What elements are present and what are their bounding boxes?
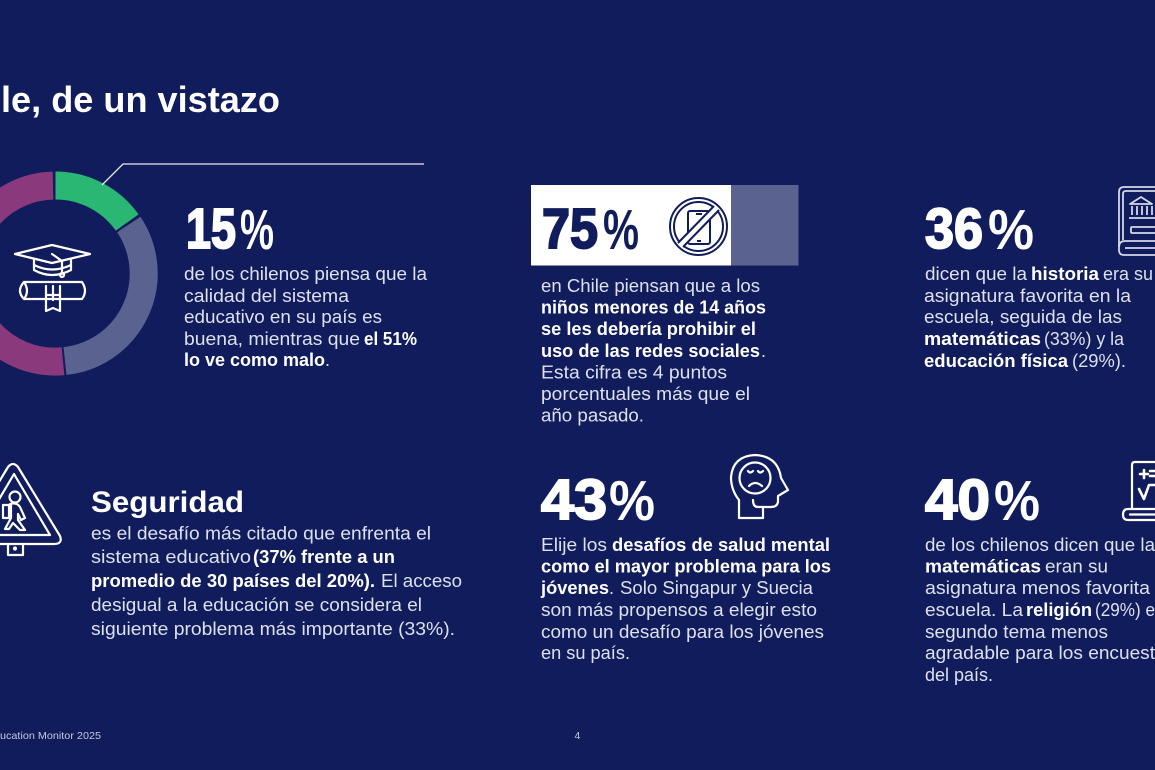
text block: least favourite: de los chilenos dicen que la (925, 535, 1155, 555)
panel: favourite subject (924, 187, 1155, 371)
text block: quality (184, 264, 428, 370)
text block: security: desigual a la educación se considera el (91, 595, 422, 615)
text block: security: (37% frente a un (253, 547, 395, 567)
text block: subjects: matemáticas (924, 329, 1041, 349)
icon: history book (1119, 187, 1155, 255)
stat: 40% (925, 468, 1040, 533)
text block: subjects: asignatura favorita en la (924, 286, 1132, 306)
text block: quality: educativo en su país es (184, 307, 382, 327)
stat: 43%: % (609, 469, 655, 533)
text block: least favourite: del país. (925, 665, 993, 685)
text block: least favourite (925, 535, 1155, 685)
text block: social media: en Chile piensan que a los (541, 276, 760, 296)
stat: 15%: % (240, 198, 274, 262)
page number: 4 (574, 730, 580, 742)
text block: least favourite: asignatura menos favorita (925, 578, 1151, 598)
text block: mental health: jóvenes (540, 578, 609, 598)
heading: Seguridad: Seguridad (91, 486, 244, 519)
text block: subjects: (29%). (1072, 351, 1126, 371)
text block: security: sistema educativo (91, 547, 251, 567)
stat bar: 75%: % (603, 198, 639, 262)
text block: mental health (540, 535, 831, 663)
stat: 36%: % (988, 198, 1034, 262)
text block: quality: calidad del sistema (184, 286, 350, 306)
text block: security: promedio de 30 países del 20%). (91, 571, 375, 591)
panel: least favourite subject (925, 462, 1155, 685)
icon: school crossing sign (0, 464, 61, 555)
text block: least favourite: religión (1026, 600, 1092, 620)
text block: quality: lo ve como malo (184, 350, 325, 370)
text block: subjects: historia (1031, 264, 1100, 284)
stat: 43%: 43 (541, 468, 607, 532)
footer source: ucation Monitor 2025 (0, 730, 101, 742)
text block: security (91, 524, 462, 639)
stat bar: 75%: 75 (542, 197, 598, 261)
text block: social media: se les debería prohibir el (541, 319, 756, 339)
text block: mental health: . (609, 578, 614, 598)
text block: mental health: en su país. (541, 643, 630, 663)
stat: 36%: 36 (925, 197, 983, 261)
text block: mental health: Solo Singapur y Suecia (620, 578, 814, 598)
text block: least favourite: matemáticas (925, 556, 1041, 576)
text block: subjects (924, 264, 1153, 371)
text block: social media: uso de las redes sociales (541, 341, 760, 361)
stat: 36% (925, 197, 1034, 262)
text block: mental health: Elije los (541, 535, 607, 555)
stat: 43% (541, 468, 655, 533)
text block: subjects: (33%) y la (1044, 329, 1125, 349)
text block: subjects: dicen que la (925, 264, 1028, 284)
text block: security: El acceso (381, 571, 462, 591)
donut chart (0, 186, 144, 362)
text block: mental health: son más propensos a elegir esto (541, 600, 817, 620)
text block: mental health: como un desafío para los jóvenes (541, 622, 824, 642)
text block: quality: buena, mientras que (184, 329, 360, 349)
text block: least favourite: escuela. La (925, 600, 1024, 620)
text block: quality: de los chilenos piensa que la (184, 264, 428, 284)
text block: social media: niños menores de 14 años (541, 298, 766, 318)
text block: least favourite: segundo tema menos (925, 622, 1108, 642)
icon: graduation cap and diploma (15, 245, 90, 311)
leader line (102, 164, 424, 185)
text block: social media: año pasado. (541, 406, 644, 426)
text block: security: siguiente problema más importante (33%). (91, 619, 455, 639)
text block: least favourite: agradable para los encuest (925, 643, 1155, 663)
text block: mental health: como el mayor problema para los (541, 556, 831, 576)
text block: social media: porcentuales más que el (541, 384, 750, 404)
panel: security (0, 464, 462, 639)
icon: math scroll (1123, 462, 1155, 520)
stat: 15%: 15 (186, 197, 236, 261)
text block: social media: Esta cifra es 4 puntos (541, 362, 727, 382)
stat bar: 75% (531, 185, 798, 266)
text block: quality: . (325, 350, 330, 370)
icon: phone prohibited (670, 198, 727, 255)
panel: quality of education (0, 164, 428, 370)
text block: quality: el 51% (364, 329, 417, 349)
text block: social media (541, 276, 766, 426)
panel: social media ban (531, 185, 798, 426)
stat: 40%: % (994, 469, 1040, 533)
text block: subjects: escuela, seguida de las (924, 307, 1122, 327)
text block: subjects: educación física (924, 351, 1069, 371)
icon: sad head (731, 455, 788, 518)
stat: 40%: 40 (925, 468, 990, 532)
text block: social media: . (761, 341, 766, 361)
text block: subjects: era su (1103, 264, 1153, 284)
text block: security: es el desafío más citado que enfrenta el (91, 524, 431, 544)
text block: least favourite: eran su (1045, 556, 1108, 576)
title: le, de un vistazo (1, 79, 280, 120)
panel: mental health (540, 455, 831, 663)
text block: mental health: desafíos de salud mental (612, 535, 830, 555)
